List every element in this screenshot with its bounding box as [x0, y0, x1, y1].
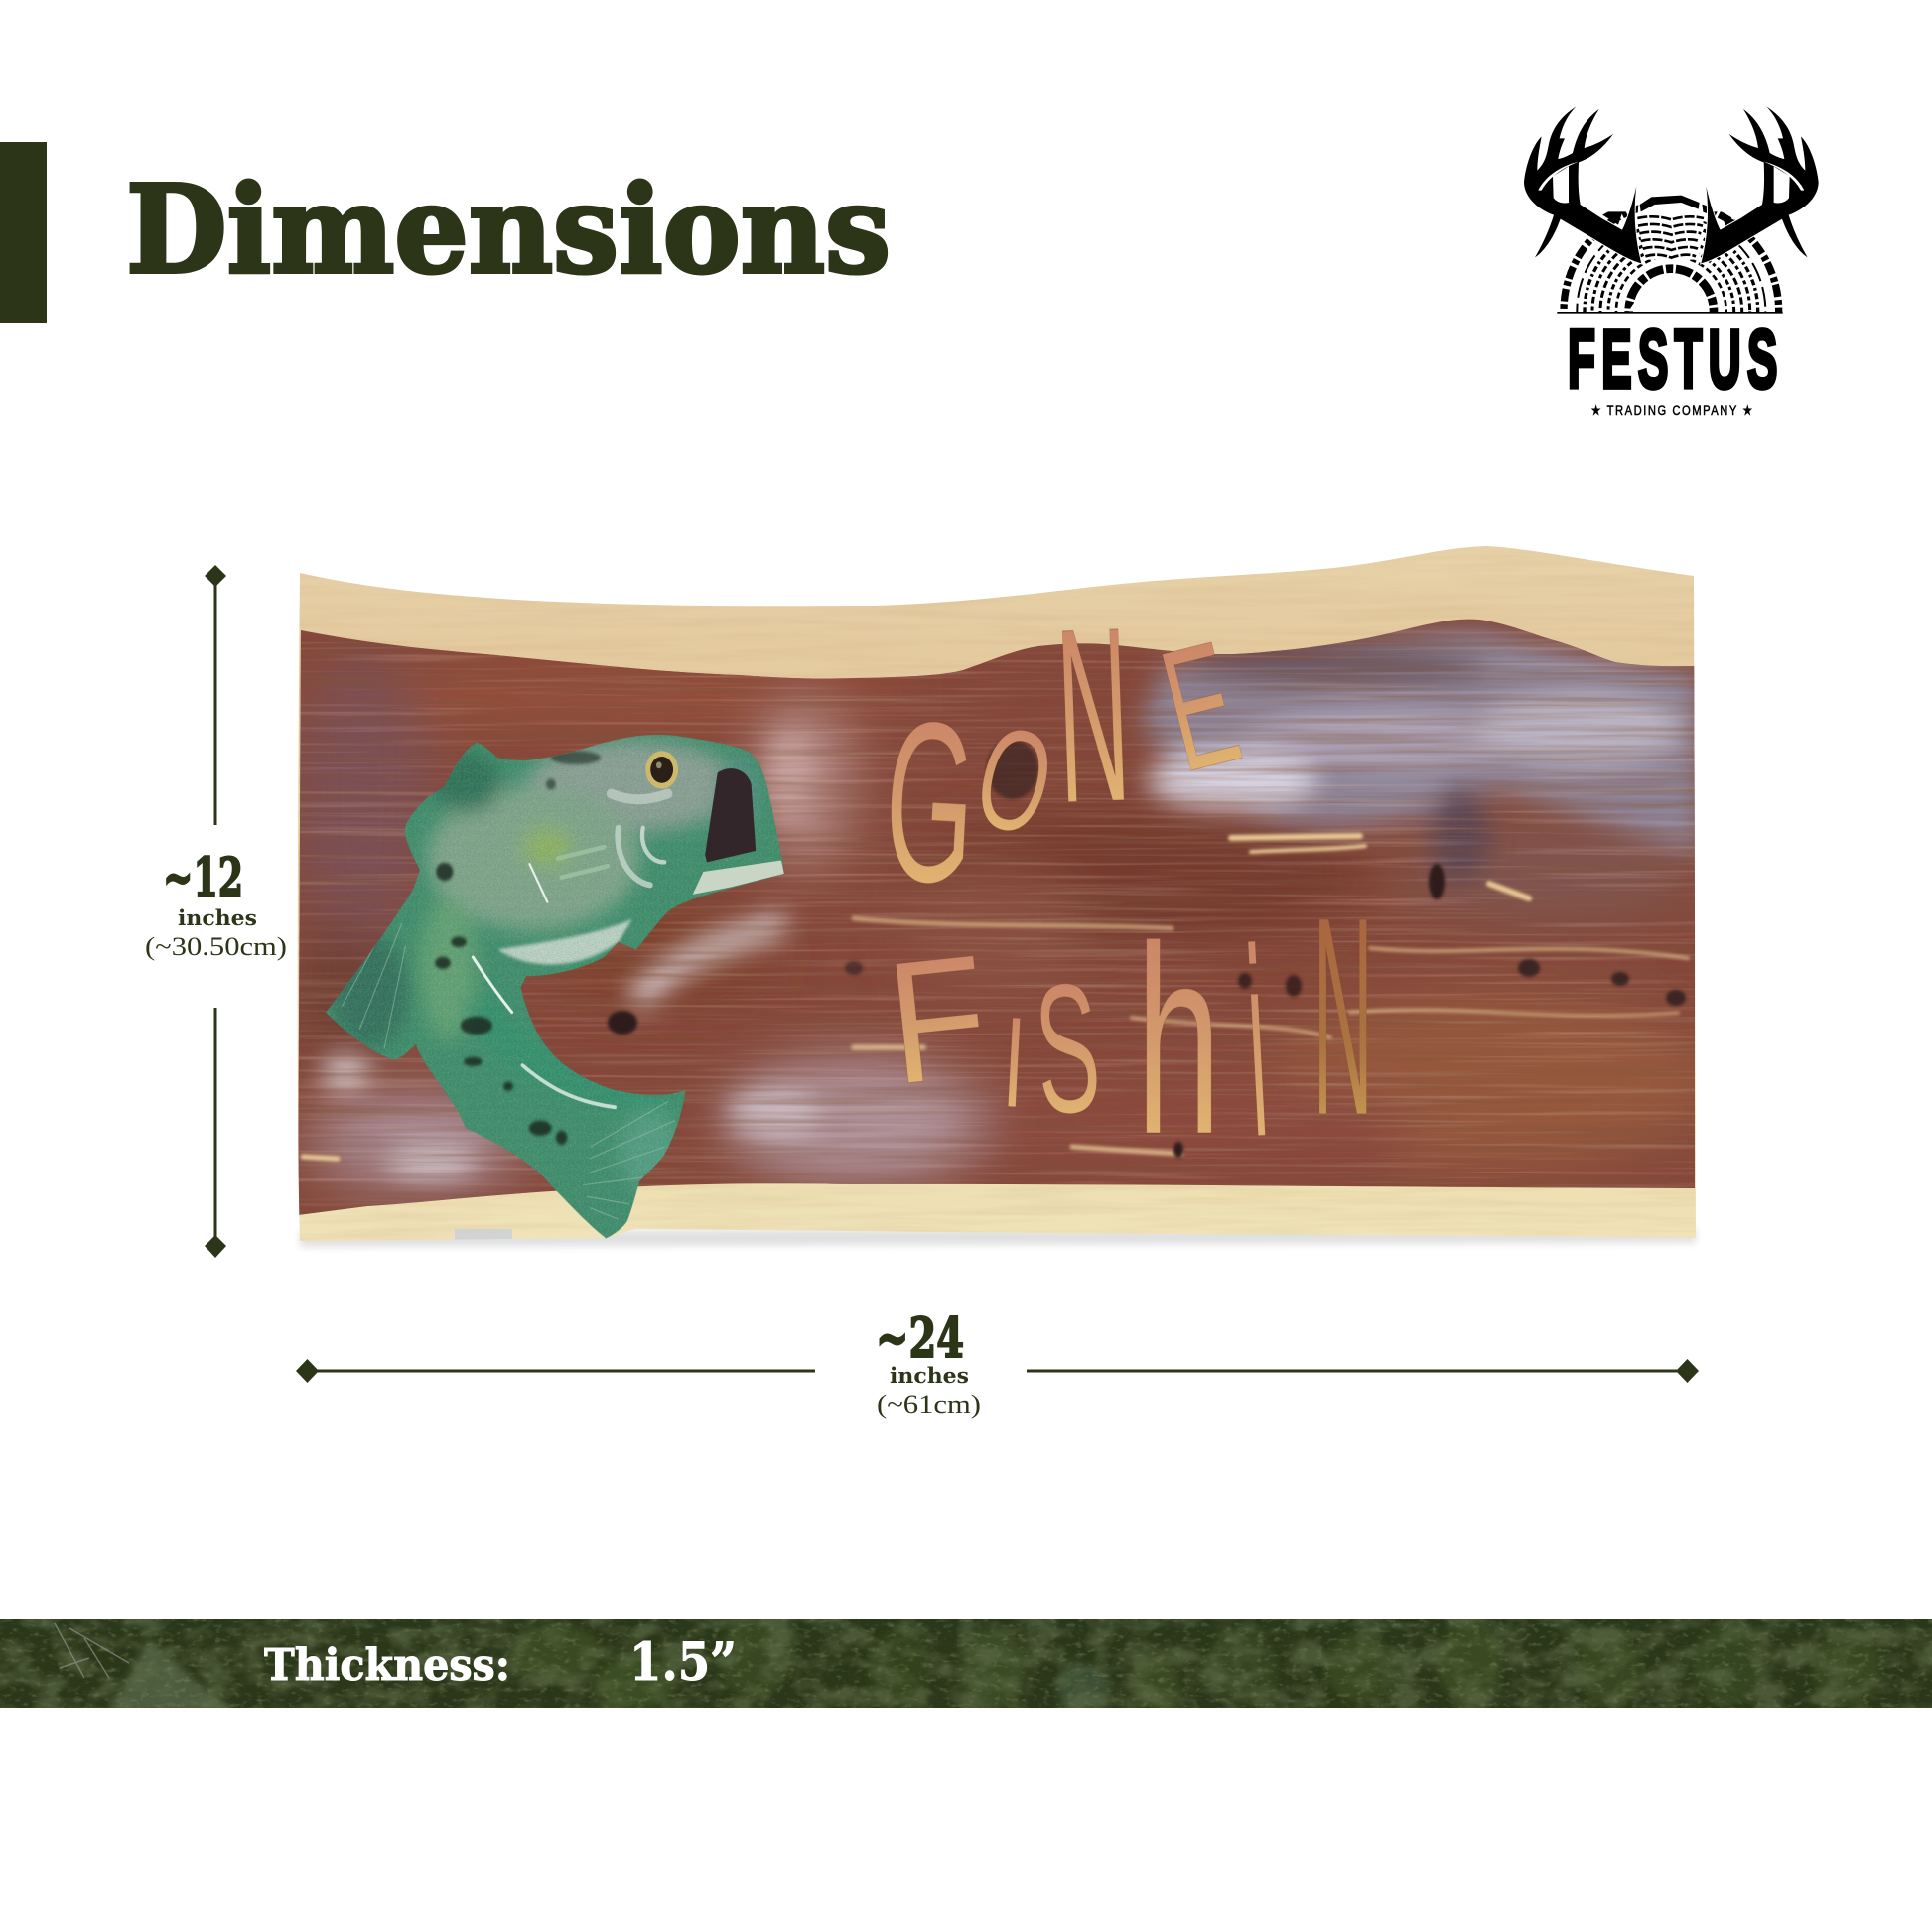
- fish mouth: [705, 768, 756, 862]
- heartwood with colour patches: [278, 606, 1718, 1231]
- thickness banner: [0, 1618, 1932, 1713]
- dead tree branches: [55, 1623, 129, 1678]
- height metric: (~30.50cm): [145, 932, 287, 961]
- carved sign words: [892, 628, 1367, 1136]
- knots: [608, 740, 1686, 1158]
- forest photo texture: [0, 1618, 1932, 1713]
- fish eye: [645, 751, 678, 789]
- carved word: FISHIN: h: [1136, 891, 1221, 1190]
- carved word: FISHIN: S: [1029, 945, 1106, 1154]
- fish dark spots: [435, 751, 601, 1145]
- wood drop shadow: [300, 1227, 1696, 1247]
- logo baseline: [1557, 312, 1783, 314]
- logo right antler: [1701, 106, 1819, 263]
- fish lower lip: [693, 860, 784, 895]
- height label: [145, 847, 287, 961]
- height value: ~12: [163, 847, 243, 908]
- carved word: GONE: O: [961, 694, 1068, 867]
- grey patch at bottom edge: [455, 1229, 512, 1239]
- carved word: GONE: N: [1052, 577, 1134, 856]
- carved word: FISHIN: i: [1240, 895, 1274, 1193]
- height dimension line: [205, 565, 226, 1258]
- logo wood slice illustration: [1560, 195, 1783, 312]
- width dimension line: [296, 1359, 1699, 1383]
- title: Dimensions: [126, 158, 891, 301]
- pale grain streaks: [303, 836, 1688, 1159]
- carved word: GONE: [892, 628, 1243, 884]
- width label: [876, 1306, 981, 1419]
- thickness value: 1.5”: [629, 1632, 737, 1693]
- carved word: GONE: E: [1146, 606, 1256, 809]
- carved word: FISHIN: I: [1000, 989, 1029, 1135]
- carved word: GONE: G: [879, 672, 981, 932]
- width value: ~24: [876, 1306, 964, 1370]
- logo: Festus Trading Company: [1524, 106, 1819, 419]
- wooden sign photo: [278, 536, 1718, 1251]
- frost glare upper right: [322, 630, 1700, 1175]
- carved word: FISHIN: N: [1312, 859, 1373, 1174]
- accent bar: [0, 142, 47, 323]
- thickness label: Thickness:: [264, 1640, 510, 1691]
- fish belly: [497, 919, 632, 964]
- fish carving: [314, 726, 792, 1246]
- logo tagline: ★ TRADING COMPANY ★: [1591, 403, 1752, 418]
- width unit: inches: [890, 1363, 969, 1388]
- height unit: inches: [178, 905, 257, 930]
- fish shading: [332, 741, 760, 1234]
- wood slab: [278, 536, 1718, 1251]
- width metric: (~61cm): [877, 1390, 981, 1419]
- logo wordmark FESTUS: FESTUS: [1568, 314, 1784, 406]
- fish fin ribs: [342, 907, 675, 1219]
- logo left antler: [1524, 106, 1641, 263]
- logo antler highlights: [1538, 162, 1804, 203]
- carved word: FISHIN: F: [879, 917, 996, 1121]
- carved word: FISHIN: [879, 859, 1373, 1193]
- fish glints: [473, 794, 668, 1107]
